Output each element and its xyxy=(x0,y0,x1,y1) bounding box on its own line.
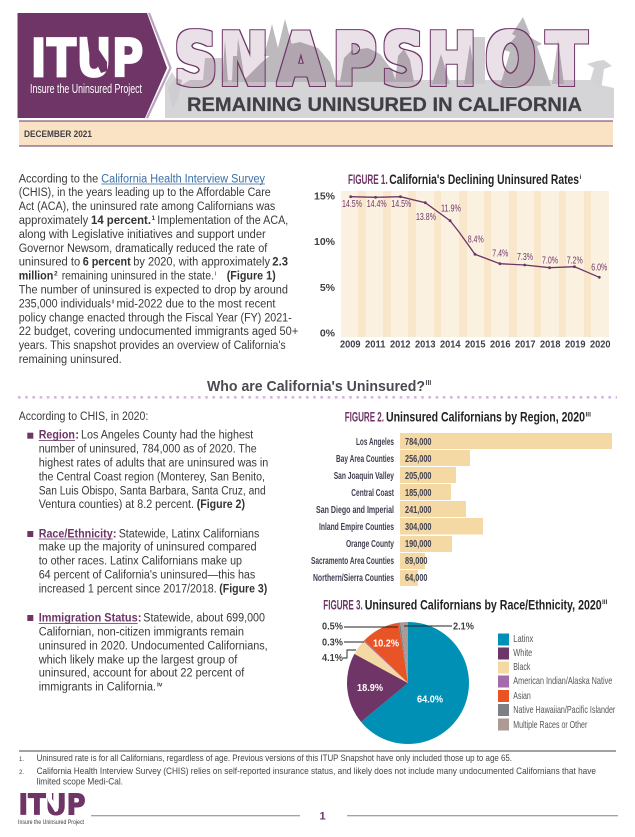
intro paragraph: 235,000 individuals xyxy=(19,298,111,310)
figure 1 heading: California's Declining Uninsured Rates xyxy=(389,172,579,187)
data labels: 7.2% xyxy=(567,254,583,266)
bullet: race/ethnicity: make up the majority of uninsured compared xyxy=(39,542,257,554)
y axis labels: 0% xyxy=(320,328,336,340)
footnotes: 2. xyxy=(19,770,24,776)
bullet: race/ethnicity: Statewide, Latinx Californians xyxy=(119,528,260,540)
section heading: III xyxy=(426,380,431,387)
intro paragraph: years. This snapshot provides an overview of California's xyxy=(19,340,286,352)
intro paragraph: 22 budget, covering undocumented immigrants aged 50+ xyxy=(19,326,299,338)
bar values: 185,000 xyxy=(405,487,432,499)
ITUP logo panel: ITUP xyxy=(30,28,144,90)
intro paragraph: uninsured to xyxy=(19,257,80,269)
ITUP logo panel xyxy=(18,13,170,118)
data labels: 8.4% xyxy=(468,234,484,246)
pie legend: Multiple Races or Other xyxy=(513,719,588,731)
bar values xyxy=(405,436,432,584)
data labels: 7.3% xyxy=(517,251,533,263)
data labels: 7.4% xyxy=(492,248,508,260)
x axis year labels: 2020 xyxy=(590,339,611,351)
figure 3 heading: III xyxy=(602,599,608,606)
figure 1 heading: FIGURE 1. xyxy=(348,172,388,187)
left column: key findings xyxy=(19,411,268,694)
bullet: race/ethnicity: : xyxy=(113,528,117,540)
subtitle: REMAINING UNINSURED IN CALIFORNIA xyxy=(187,95,582,116)
skyline illustration xyxy=(165,17,614,118)
bullet: race/ethnicity: increased 1 percent since 2017/2018. xyxy=(39,583,217,595)
bullet: immigration status: Immigration Status xyxy=(39,613,138,625)
x axis year labels xyxy=(340,339,611,351)
bullet: immigration status: which likely make up the largest group of xyxy=(38,654,238,666)
data labels: 6.0% xyxy=(591,262,607,274)
y axis labels: 15% xyxy=(314,190,336,202)
region labels: Sacramento Area Counties xyxy=(311,555,394,567)
region labels: Los Angeles xyxy=(356,436,394,448)
intro paragraph: by 2020, with approximately xyxy=(133,257,270,269)
figure 3 pie chart: 0.5% xyxy=(322,621,343,632)
left column: key findings: According to CHIS, in 2020: xyxy=(19,411,148,423)
y axis labels: 5% xyxy=(320,282,336,294)
intro paragraph xyxy=(19,173,299,366)
data labels: 14.5% xyxy=(342,198,362,210)
bullet: region: (Figure 2) xyxy=(197,499,245,511)
bullet: region: Ventura counties) at 8.2 percent. xyxy=(39,499,194,511)
data labels: 7.0% xyxy=(542,254,558,266)
bullet: immigration status: : xyxy=(138,613,142,625)
x axis year labels: 2018 xyxy=(540,339,561,351)
intro paragraph: 2 xyxy=(54,271,58,278)
x axis year labels: 2009 xyxy=(340,339,361,351)
x axis year labels: 2014 xyxy=(440,339,461,351)
region labels xyxy=(311,436,394,584)
header banner xyxy=(18,13,614,118)
bullet: region: Region xyxy=(39,430,75,442)
figure 3 pie chart: 18.9% xyxy=(357,683,383,694)
intro paragraph: along with Legislative initiatives and support under xyxy=(19,229,266,241)
intro paragraph: remaining uninsured. xyxy=(19,354,122,366)
figure 3 pie chart: 4.1% xyxy=(322,653,343,664)
figure 2 heading: Uninsured Californians by Region, 2020 xyxy=(386,410,585,425)
footer logo: ITUP xyxy=(18,788,86,822)
footer logo: Insure the Uninsured Project xyxy=(18,819,84,826)
x axis year labels: 2016 xyxy=(490,339,511,351)
data labels: 11.9% xyxy=(441,202,461,214)
data labels: 14.4% xyxy=(367,198,387,210)
bar values: 241,000 xyxy=(405,504,432,516)
figure 2 heading: FIGURE 2. xyxy=(345,410,384,425)
bullet: race/ethnicity: 64 percent of California's uninsured—this has xyxy=(39,569,256,581)
bullet: race/ethnicity xyxy=(27,528,267,595)
bullet: race/ethnicity: Race/Ethnicity xyxy=(39,528,113,540)
ITUP logo panel: Insure the Uninsured Project xyxy=(30,81,142,96)
figure 1 heading xyxy=(348,172,582,187)
bullet: immigration status: iv xyxy=(157,682,163,689)
x axis year labels: 2012 xyxy=(390,339,411,351)
x axis year labels: 2011 xyxy=(365,339,386,351)
bullet: immigration status: uninsured, account for about 22 percent of xyxy=(39,667,245,679)
bullet: immigration status: uninsured in 2020. Undocumented Californians, xyxy=(39,640,268,652)
x axis year labels: 2019 xyxy=(565,339,586,351)
intro paragraph: Governor Newsom, dramatically reduced the rate of xyxy=(19,243,268,255)
bar values: 89,000 xyxy=(405,555,428,567)
bullet: region xyxy=(27,430,268,511)
pie legend: Latinx xyxy=(513,633,534,645)
bullet: region: highest rates of adults that are uninsured was in xyxy=(39,457,268,469)
intro paragraph: 14 percent. xyxy=(91,215,151,227)
region labels: Central Coast xyxy=(351,487,394,499)
data labels: 14.5% xyxy=(391,198,411,210)
figure 2 heading: III xyxy=(586,412,591,418)
bar values: 205,000 xyxy=(405,470,432,482)
intro paragraph: The number of uninsured is expected to drop by around xyxy=(19,284,288,296)
date band: DECEMBER 2021 xyxy=(24,129,93,140)
bullet: immigration status xyxy=(27,613,268,694)
section heading: Who are California's Uninsured? xyxy=(207,378,425,395)
figure 1 line chart xyxy=(314,190,611,351)
pie legend: Asian xyxy=(513,690,531,702)
intro paragraph: Implementation of the ACA, xyxy=(157,215,288,227)
bullet: race/ethnicity: to other races. Latinx Californians make up xyxy=(39,555,242,567)
pie leader lines xyxy=(343,626,452,658)
footnotes: 1. xyxy=(19,757,24,763)
footnotes: limited scope Medi-Cal. xyxy=(37,776,123,788)
region labels: Bay Area Counties xyxy=(336,453,394,465)
footnotes: Uninsured rate is for all Californians, regardless of age. Previous versions of this ITUP Snapshot have only included those up to age 65. xyxy=(37,753,512,764)
bullet: immigration status: Statewide, about 699,000 xyxy=(143,613,265,625)
intro paragraph: ii xyxy=(112,298,114,305)
intro paragraph: 2.3 xyxy=(272,257,288,269)
bullet: race/ethnicity: (Figure 3) xyxy=(219,583,267,595)
bullet: immigration status: Californian, non-citizen immigrants remain xyxy=(39,627,244,639)
bar values: 64,000 xyxy=(405,572,428,584)
y axis labels: 10% xyxy=(314,236,336,248)
intro paragraph: California Health Interview Survey xyxy=(101,173,265,185)
intro paragraph: remaining uninsured in the state. xyxy=(62,271,214,283)
region labels: San Joaquin Valley xyxy=(334,470,394,482)
pie legend xyxy=(498,633,616,731)
data labels: 13.8% xyxy=(416,211,436,223)
bullet: immigration status: immigrants in California. xyxy=(39,682,156,694)
bar values: 304,000 xyxy=(405,521,432,533)
figure 3 pie chart: 0.3% xyxy=(322,638,343,649)
intro paragraph: (CHIS), in the years leading up to the Affordable Care xyxy=(19,187,271,199)
intro paragraph: mid-2022 due to the most recent xyxy=(116,298,276,310)
figure 1 heading: i xyxy=(580,174,582,181)
bullet: region: the Central Coast region (Monterey, San Benito, xyxy=(39,471,265,483)
bullet: region: : xyxy=(75,430,79,442)
data labels xyxy=(342,198,607,274)
figure 3 pie chart: 2.1% xyxy=(453,621,474,632)
region labels: San Diego and Imperial xyxy=(316,504,394,516)
bar values: 190,000 xyxy=(405,538,432,550)
region labels: Orange County xyxy=(346,538,394,550)
intro paragraph: approximately xyxy=(19,215,88,227)
intro paragraph: Act (ACA), the uninsured rate among Californians was xyxy=(19,201,276,213)
region labels: Northern/Sierra Counties xyxy=(313,572,394,584)
region labels: Inland Empire Counties xyxy=(319,521,394,533)
figure 3 heading: FIGURE 3. xyxy=(323,597,363,612)
bullet: region: number of uninsured, 784,000 as of 2020. The xyxy=(39,443,257,455)
SNAPSHOT outlined title: SNAPSHOT xyxy=(175,18,587,102)
x axis year labels: 2013 xyxy=(415,339,436,351)
figure 3 pie chart: 64.0% xyxy=(417,695,443,706)
intro paragraph: (Figure 1) xyxy=(227,271,276,283)
bullet: region: Los Angeles County had the highest xyxy=(81,430,254,442)
intro paragraph: According to the xyxy=(19,173,98,185)
bar values: 784,000 xyxy=(405,436,432,448)
intro paragraph: million xyxy=(19,271,53,283)
figure 2 bar chart xyxy=(311,433,612,586)
figure 3 pie chart: 10.2% xyxy=(373,639,399,650)
footnotes xyxy=(19,751,616,788)
x axis year labels: 2015 xyxy=(465,339,486,351)
x axis year labels: 2017 xyxy=(515,339,536,351)
page number: 1 xyxy=(319,810,326,822)
intro paragraph: 1 xyxy=(152,215,156,222)
bar values: 256,000 xyxy=(405,453,432,465)
bullet: region: San Luis Obispo, Santa Barbara, Santa Cruz, and xyxy=(39,485,266,497)
intro paragraph: policy change enacted through the Fiscal Year (FY) 2021- xyxy=(19,312,292,324)
figure 3 pie chart xyxy=(322,621,474,744)
pie legend: White xyxy=(513,647,532,659)
pie legend: Black xyxy=(513,661,531,673)
y axis labels xyxy=(314,190,336,340)
date band xyxy=(19,120,613,146)
uninsured rate line xyxy=(349,195,601,279)
section heading xyxy=(18,378,617,397)
intro paragraph: i xyxy=(215,271,216,278)
intro paragraph: 6 percent xyxy=(83,257,131,269)
